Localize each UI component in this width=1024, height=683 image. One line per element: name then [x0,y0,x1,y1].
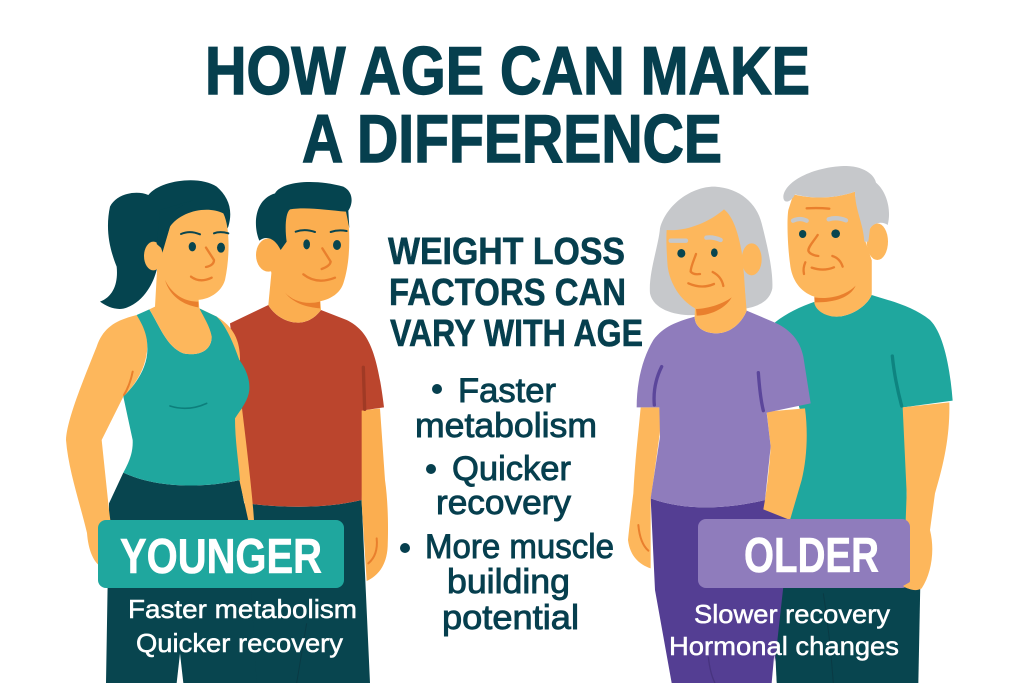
bullet: faster metabolism: Faster [458,372,556,410]
older woman purple shirt [637,311,811,507]
older woman neck and head [666,209,762,333]
older woman arms [628,407,807,568]
older changes text: Slower recovery [694,599,890,629]
label: younger [98,520,344,588]
bullet: more muscle building potential: potential [442,599,579,637]
older man [775,166,953,683]
younger man [193,182,388,683]
bullet list [400,372,614,637]
white gap between the trousers [772,653,777,683]
younger woman near arm [66,315,147,568]
younger woman teal tank top [123,308,249,486]
older couple illustration [628,166,953,683]
younger woman trousers [106,473,257,683]
older woman [628,187,811,683]
older woman trousers [651,498,790,683]
label: older: OLDER [744,529,879,583]
older changes text [669,599,899,661]
label: older [698,519,910,588]
older man's hand below label [903,582,921,589]
younger couple illustration [66,180,388,683]
older changes text: Hormonal changes [669,631,899,661]
bullet: more muscle building potential [400,528,614,637]
younger man neck and head [256,182,352,323]
older man arm [903,402,949,590]
younger man arm [360,408,388,581]
bullet: faster metabolism: metabolism [415,407,597,445]
older woman hair [650,187,772,315]
subheading [388,231,643,355]
younger woman far arm [199,308,254,521]
subheading: WEIGHT LOSS [388,231,625,273]
bullet: more muscle building potential: building [447,563,570,601]
older man neck and head [783,166,889,317]
older man trousers [775,517,922,683]
younger man red shirt [230,305,384,507]
inseam gap [177,653,183,683]
younger woman neck and head [100,180,230,354]
younger man sleeve crease [363,367,365,409]
bullet: more muscle building potential: More muscle [425,528,614,566]
bullet: faster metabolism [415,372,597,445]
subheading: FACTORS CAN [389,272,626,314]
label: younger: YOUNGER [120,530,322,584]
younger benefits text [128,594,357,658]
older man teal shirt [775,295,953,523]
title [205,33,810,177]
bullet: quicker recovery [426,450,571,522]
younger man trousers [193,500,370,683]
younger benefits text: Faster metabolism [128,594,357,624]
title: HOW AGE CAN MAKE [205,33,810,109]
title: A DIFFERENCE [302,101,722,177]
bullet: quicker recovery: recovery [436,484,571,522]
younger woman [66,180,257,683]
younger benefits text: Quicker recovery [136,628,343,658]
bullet: quicker recovery: Quicker [452,450,571,488]
subheading: VARY WITH AGE [390,313,643,355]
